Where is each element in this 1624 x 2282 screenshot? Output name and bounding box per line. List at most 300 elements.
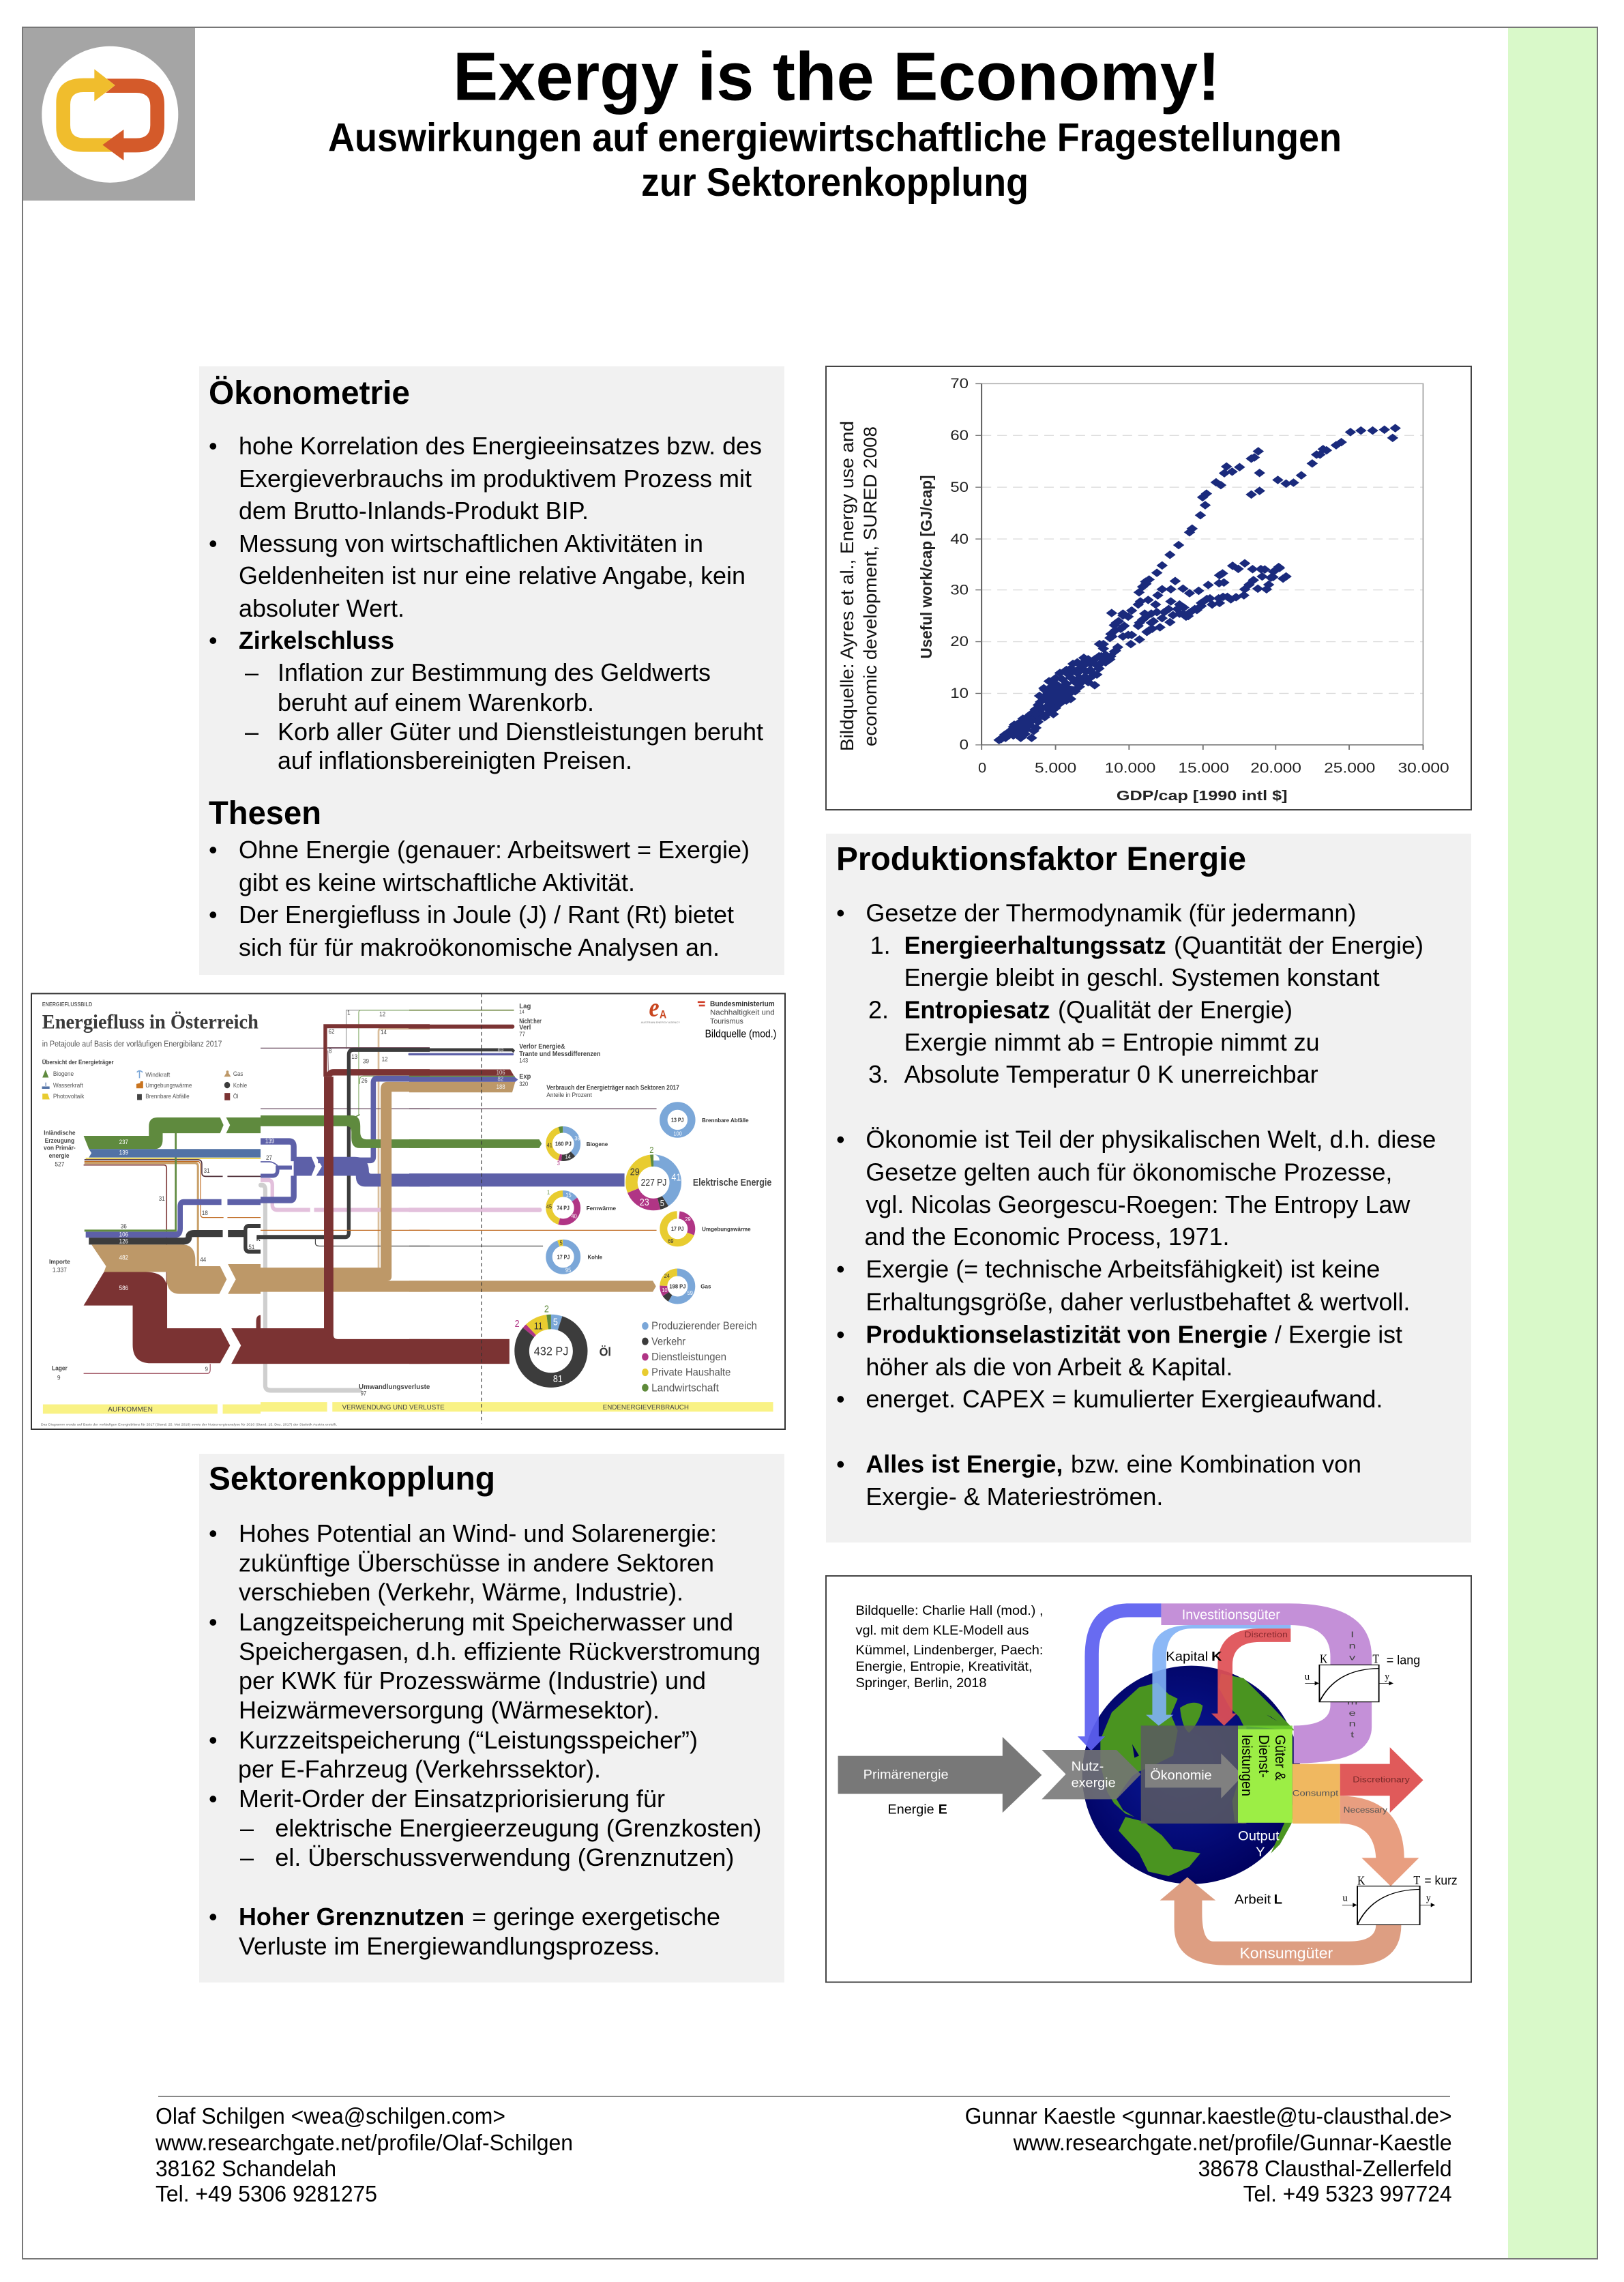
chevron: Nutzexergie: exergie xyxy=(1072,1776,1116,1790)
donut labels and sector legend: Elektrische Energie xyxy=(693,1177,772,1188)
output labels: Verbrauch der Energieträger nach Sektoren 2017 xyxy=(546,1084,679,1092)
text block: Ökonometrie bullets: dem Brutto-Inlands-Produkt BIP. xyxy=(239,497,589,525)
arrow: Discretionary xyxy=(1340,1747,1423,1813)
flow values: 12 xyxy=(379,1010,385,1018)
energy carrier legend: Gas xyxy=(233,1070,243,1077)
arrow: Investitionsgüter: Investitionsgüter xyxy=(1182,1607,1280,1622)
output labels: Nicht:her xyxy=(519,1017,542,1025)
arrow: Investitionsgüter: I xyxy=(1350,1630,1354,1639)
arrow: blue feedback xyxy=(1078,1603,1161,1751)
logos: Tourismus xyxy=(710,1018,743,1026)
donut: Biogene xyxy=(549,1130,577,1158)
tick labels: 50 xyxy=(950,480,969,495)
source group labels: Erzeugung xyxy=(45,1137,74,1144)
donut labels and sector legend: Fernwärme xyxy=(587,1205,617,1212)
energy carrier legend: Photovoltaik xyxy=(53,1093,85,1100)
text block: Ökonometrie bullets: Messung von wirtschaftlichen Aktivitäten in xyxy=(239,529,703,557)
text block: Ökonomie und Exergie: • xyxy=(836,1255,845,1283)
flow values: 482 xyxy=(119,1254,128,1261)
text block: Ökonometrie bullets: absoluter Wert. xyxy=(239,594,404,622)
flow values: 44 xyxy=(200,1256,206,1263)
text block: Thesen bullets: • xyxy=(209,901,218,928)
transfer block: long time constant: = lang xyxy=(1387,1653,1420,1667)
source group labels: energie xyxy=(49,1152,70,1159)
text block: Ökonomie und Exergie: energet. CAPEX = kumulierter Exergieaufwand. xyxy=(866,1385,1383,1413)
energy carrier legend: Kohle xyxy=(233,1082,247,1089)
text block: Sektorenkopplung bullets: per E-Fahrzeug (Verkehrssektor). xyxy=(238,1755,601,1783)
subtitle: Auswirkungen auf energiewirtschaftliche Fragestellungen xyxy=(328,115,1342,160)
donut labels and sector legend: 81 xyxy=(553,1373,563,1384)
text block: Gesetze der Thermodynamik: • xyxy=(836,899,845,926)
section labels xyxy=(342,1383,689,1411)
flow values: 31 xyxy=(159,1195,165,1202)
text block: Sektorenkopplung bullets: • xyxy=(209,1785,218,1813)
footer: author Olaf Schilgen: Olaf Schilgen <wea@schilgen.com> xyxy=(156,2103,505,2129)
flow values: 139 xyxy=(119,1149,128,1156)
energy carrier legend: Wasserkraft xyxy=(53,1082,83,1089)
arrow: Investitionsgüter: n xyxy=(1348,1642,1356,1651)
text block: Sektorenkopplung bullets: elektrische Energieerzeugung (Grenzkosten) xyxy=(275,1814,761,1842)
globe xyxy=(1082,1666,1301,1884)
flow values: 18 xyxy=(202,1210,208,1216)
donut labels and sector legend: 17 PJ xyxy=(557,1254,570,1260)
footer rule xyxy=(158,2096,1450,2097)
text block: Ökonometrie bullets: • xyxy=(209,626,218,654)
rotated label: Güter und Dienstleistungen: Dienst- xyxy=(1256,1735,1271,1778)
donut labels and sector legend: 5 xyxy=(553,1316,558,1328)
donut labels and sector legend: 17 PJ xyxy=(671,1225,684,1232)
donut labels and sector legend: 38 xyxy=(574,1135,580,1142)
text block: Sektorenkopplung bullets: zukünftige Überschüsse in andere Sektoren xyxy=(239,1549,714,1577)
subtitle xyxy=(328,115,1342,205)
donut labels and sector legend: Biogene xyxy=(587,1141,608,1147)
text block: Alles ist Energie xyxy=(836,1450,1361,1510)
legend: sectors: Verkehr xyxy=(651,1336,685,1348)
donut labels and sector legend: 40 xyxy=(572,1213,577,1220)
output label xyxy=(1238,1829,1280,1860)
flow values: 139 xyxy=(265,1137,275,1145)
text block: Ökonomie und Exergie: • xyxy=(836,1321,845,1348)
text block: Alles ist Energie: Alles ist Energie, xyxy=(866,1450,1063,1478)
energy carrier legend: Biogene xyxy=(53,1070,74,1077)
text block: Sektorenkopplung bullets: Merit-Order der Einsatzpriorisierung für xyxy=(239,1785,665,1813)
panel: scatter chart useful work vs GDP xyxy=(826,366,1471,810)
text block: Thesen bullets: Ohne Energie (genauer: Arbeitswert = Exergie) xyxy=(239,836,750,864)
footer: author Olaf Schilgen: 38162 Schandelah xyxy=(156,2156,336,2181)
flow values: 26 xyxy=(361,1077,368,1084)
arrow: red discretion: Discretion xyxy=(1244,1630,1288,1639)
donut labels and sector legend: 14 xyxy=(565,1154,571,1160)
flow values: 51 xyxy=(248,1244,255,1250)
source group labels: von Primär- xyxy=(44,1144,76,1152)
text block: Sektorenkopplung bullets: verschieben (Verkehr, Wärme, Industrie). xyxy=(239,1578,683,1606)
legend: sectors: Produzierender Bereich xyxy=(651,1321,757,1332)
output labels: 106 xyxy=(497,1068,505,1076)
text block: Alles ist Energie: bzw. eine Kombination von xyxy=(1071,1450,1361,1478)
arrow: Primärenergie xyxy=(838,1737,1042,1813)
tick labels xyxy=(950,376,1449,776)
sankey left half xyxy=(41,1001,430,1427)
text block: Ökonomie und Exergie: • xyxy=(836,1126,845,1153)
arrow: Necessary xyxy=(1340,1796,1419,1886)
energy carrier legend: Brennbare Abfälle xyxy=(145,1093,190,1100)
text block: Ökonometrie bullets: – xyxy=(245,718,259,746)
logos: A xyxy=(660,1009,666,1021)
data points xyxy=(999,428,1396,740)
text block: Gesetze der Thermodynamik: Entropiesatz xyxy=(904,996,1050,1023)
donut: Umgebungswärme xyxy=(664,1215,692,1243)
text block: Ökonomie und Exergie: Gesetze gelten auch für ökonomische Prozesse, xyxy=(866,1158,1392,1186)
donut labels and sector legend: 5 xyxy=(660,1198,664,1208)
flows xyxy=(84,1010,430,1390)
donut labels and sector legend: 11 xyxy=(534,1320,543,1331)
tick labels: 40 xyxy=(950,531,969,547)
rotated label: Güter und Dienstleistungen xyxy=(1239,1735,1288,1796)
donut labels and sector legend: 432 PJ xyxy=(534,1346,568,1358)
arrow: Investitionsgüter: m xyxy=(1347,1698,1357,1707)
text block: Gesetze der Thermodynamik: 2. xyxy=(868,996,889,1023)
text block: Gesetze der Thermodynamik: Absolute Temperatur 0 K unerreichbar xyxy=(904,1060,1318,1088)
footer: author Olaf Schilgen xyxy=(155,2103,573,2206)
logos: e xyxy=(649,992,660,1022)
donut labels and sector legend: 74 PJ xyxy=(557,1205,570,1212)
output labels: Verl xyxy=(519,1023,531,1032)
donut: Elektrische Energie xyxy=(632,1160,675,1205)
text block: Ökonometrie bullets: Zirkelschluss xyxy=(239,626,394,654)
text block: Gesetze der Thermodynamik: Gesetze der Thermodynamik (für jedermann) xyxy=(866,899,1356,926)
donut labels and sector legend: Gas xyxy=(700,1283,711,1290)
donut labels and sector legend: Brennbare Abfälle xyxy=(702,1117,749,1124)
text block: Gesetze der Thermodynamik: (Quantität der Energie) xyxy=(1174,931,1423,959)
subtitle: zur Sektorenkopplung xyxy=(641,160,1029,205)
donut: Gas xyxy=(664,1272,692,1300)
donut labels and sector legend: 13 PJ xyxy=(671,1117,684,1124)
heading: Sektorenkopplung: Sektorenkopplung xyxy=(209,1461,495,1497)
arrow: Konsumgüter: Konsumgüter xyxy=(1239,1945,1333,1962)
source group labels: Lager xyxy=(52,1364,68,1372)
label: Energie E: E xyxy=(939,1802,947,1817)
donut: Brennbare Abfälle xyxy=(664,1106,692,1134)
y axis title: Useful work/cap [GJ/cap] xyxy=(917,475,935,659)
footer: author Olaf Schilgen: Tel. +49 5306 9281275 xyxy=(156,2181,377,2206)
text block: Sektorenkopplung bullets: • xyxy=(209,1608,218,1636)
transfer block: short time constant: K xyxy=(1357,1875,1365,1888)
energy carrier legend xyxy=(42,1070,247,1100)
donut labels and sector legend: 41 xyxy=(547,1142,552,1149)
output labels: Trante und Messdifferenzen xyxy=(519,1050,601,1058)
text block: Sektorenkopplung bullets: Kurzzeitspeicherung (“Leistungsspeicher”) xyxy=(239,1726,698,1754)
source note: Springer, Berlin, 2018 xyxy=(855,1676,986,1691)
tick labels: 20 xyxy=(950,634,969,649)
flow: Brennstoffe dünn xyxy=(84,1165,166,1329)
label: Kapital K: Kapital xyxy=(1166,1650,1208,1664)
diagram heading xyxy=(42,1001,259,1066)
donut labels and sector legend: 69 xyxy=(668,1238,674,1244)
label: Arbeit L: L xyxy=(1274,1892,1282,1907)
text block: Ökonomie und Exergie: and the Economic Process, 1971. xyxy=(865,1223,1229,1250)
text block: Gesetze der Thermodynamik: 1. xyxy=(870,931,891,959)
output label: Output xyxy=(1238,1829,1280,1843)
output labels: 14 xyxy=(519,1008,525,1015)
arrow: Investitionsgüter: n xyxy=(1348,1720,1356,1729)
text block: Ökonomie und Exergie: Ökonomie ist Teil der physikalischen Welt, d.h. diese xyxy=(866,1126,1436,1153)
text block: Ökonometrie bullets: • xyxy=(209,432,218,460)
flow values: 1 xyxy=(347,1009,351,1016)
donut labels and sector legend: 160 PJ xyxy=(555,1141,572,1147)
image source note: economic development, SURED 2008 xyxy=(860,426,881,746)
text block: Alles ist Energie: Exergie- & Materieströmen. xyxy=(866,1482,1163,1510)
donut labels and sector legend: 5 xyxy=(559,1240,563,1246)
tick labels: 60 xyxy=(950,428,969,443)
transfer block: long time constant: y xyxy=(1385,1671,1389,1682)
legend: sectors: Landwirtschaft xyxy=(651,1382,719,1394)
text block: Ökonometrie bullets: beruht auf einem Warenkorb. xyxy=(278,688,594,716)
panel: KLE economy diagram with globe xyxy=(826,1576,1471,1983)
box: Consumption: Consumpt xyxy=(1293,1789,1339,1798)
logos: AUSTRIAN ENERGY AGENCY xyxy=(641,1021,681,1024)
donut: Kohle xyxy=(549,1243,577,1271)
text block: Ökonometrie bullets: Geldenheiten ist nur eine relative Angabe, kein xyxy=(239,561,745,589)
text block: Ökonomie und Exergie: Produktionselastizität von Energie xyxy=(866,1321,1267,1348)
donut labels and sector legend: 23 xyxy=(640,1197,649,1208)
flow values: 14 xyxy=(381,1029,387,1036)
section labels: VERWENDUNG UND VERLUSTE xyxy=(342,1403,445,1411)
tick labels: 30.000 xyxy=(1398,761,1449,776)
transfer block: short time constant: = kurz xyxy=(1424,1874,1458,1888)
text block: Sektorenkopplung bullets: – xyxy=(240,1843,254,1871)
image source note: Bildquelle: Ayres et al., Energy use and xyxy=(837,421,857,751)
donut labels and sector legend xyxy=(515,1117,772,1394)
arrow: Investitionsgüter xyxy=(1161,1603,1372,1764)
flow values: 12 xyxy=(382,1055,388,1063)
text block: Ökonomie und Exergie xyxy=(836,1126,1436,1413)
label: Kapital K: K xyxy=(1211,1650,1222,1664)
tick labels: 0 xyxy=(960,737,969,752)
diagram heading: Energiefluss in Österreich xyxy=(42,1010,259,1033)
energy carrier legend: Windkraft xyxy=(145,1071,171,1079)
chevron: Nutzexergie: Nutz- xyxy=(1072,1759,1104,1774)
heading: Produktionsfaktor Energie: Produktionsfaktor Energie xyxy=(836,841,1246,877)
source note: Kümmel, Lindenberger, Paech: xyxy=(855,1643,1044,1658)
text block: Sektorenkopplung bullets: = geringe exergetische xyxy=(472,1903,720,1931)
text block: Thesen bullets: sich für für makroökonomische Analysen an. xyxy=(239,933,720,961)
output labels: 82 xyxy=(497,1075,503,1083)
text block: Ökonomie und Exergie: • xyxy=(836,1385,845,1413)
output labels: Lag xyxy=(519,1002,531,1010)
output labels: Verlor Energie& xyxy=(519,1043,565,1051)
diagram footnote: Das Diagramm wurde auf Basis der vorläufigen Energiebilanz für 2017 (Stand: 25. Mai 2018) sowie der Nutzenergieanalyse für 2016 (Stand: 15. Dez. 2017) der Statistik Austria erstellt. xyxy=(41,1423,337,1427)
flow values: 9 xyxy=(205,1366,208,1373)
donut labels and sector legend: Öl xyxy=(600,1345,611,1359)
transfer block: short time constant: T xyxy=(1413,1874,1420,1887)
label: Arbeit L: Arbeit xyxy=(1235,1892,1271,1907)
flow values: 39 xyxy=(363,1057,369,1065)
source note xyxy=(855,1604,1044,1691)
arrow: Investitionsgüter: e xyxy=(1348,1709,1356,1718)
text block: Gesetze der Thermodynamik: Exergie nimmt ab = Entropie nimmt zu xyxy=(904,1028,1320,1056)
image source note: Bildquelle (mod.) xyxy=(705,1029,776,1040)
tick labels: 5.000 xyxy=(1035,761,1076,776)
output labels: Anteile in Prozent xyxy=(546,1092,592,1098)
tick labels: 10.000 xyxy=(1105,761,1155,776)
text block: Sektorenkopplung bullets: Verluste im Energiewandlungsprozess. xyxy=(239,1932,660,1960)
arrow: Investitionsgüter: v xyxy=(1349,1653,1356,1662)
tick labels: 70 xyxy=(950,376,969,392)
source note: Bildquelle: Charlie Hall (mod.) , xyxy=(855,1604,1044,1618)
donut labels and sector legend: 29 xyxy=(630,1167,640,1177)
text block: Ökonomie und Exergie: / Exergie ist xyxy=(1275,1321,1402,1348)
donut labels and sector legend: 100 xyxy=(673,1130,682,1137)
arrow: Primärenergie: Primärenergie xyxy=(863,1768,949,1782)
flow values: 126 xyxy=(119,1238,128,1245)
transfer block: short time constant: y xyxy=(1426,1892,1431,1903)
text block: Sektorenkopplung bullets: • xyxy=(209,1903,218,1931)
text block: Ökonomie und Exergie: vgl. Nicolas Georgescu-Roegen: The Entropy Law xyxy=(866,1190,1411,1218)
output label: Y xyxy=(1256,1845,1265,1860)
section labels: 97 xyxy=(361,1390,367,1397)
footer: author Olaf Schilgen: www.researchgate.net/profile/Olaf-Schilgen xyxy=(155,2130,573,2155)
chart plot xyxy=(950,376,1449,804)
text block: Gesetze der Thermodynamik: 3. xyxy=(868,1060,889,1088)
text block: Ökonomie und Exergie: Erhaltungsgröße, daher verlustbehaftet & wertvoll. xyxy=(866,1288,1410,1315)
legend: sectors: Private Haushalte xyxy=(651,1367,730,1379)
text block: Gesetze der Thermodynamik: Energieerhaltungssatz xyxy=(904,931,1166,959)
label: Energie E: Energie xyxy=(888,1802,934,1817)
flow values: 8 xyxy=(329,1047,332,1055)
donut labels and sector legend: 3 xyxy=(557,1160,560,1167)
transfer block: short time constant xyxy=(1342,1874,1458,1925)
text block: Ökonometrie bullets: auf inflationsbereinigten Preisen. xyxy=(278,746,632,774)
flow: Rest xyxy=(325,1026,430,1077)
panel: Produktionsfaktor Energie xyxy=(826,834,1471,1542)
logos xyxy=(641,992,775,1026)
logos: Nachhaltigkeit und xyxy=(710,1009,775,1017)
transfer block: long time constant: K xyxy=(1320,1652,1327,1666)
donut labels and sector legend: 1 xyxy=(547,1189,550,1196)
text block: Thesen bullets xyxy=(209,836,750,961)
text block: Sektorenkopplung bullets: el. Überschussverwendung (Grenznutzen) xyxy=(275,1843,734,1871)
output labels: 69 xyxy=(497,1047,503,1053)
source note: Energie, Entropie, Kreativität, xyxy=(855,1660,1033,1674)
box: Ökonomie: Ökonomie xyxy=(1150,1768,1212,1783)
green side strip xyxy=(1508,27,1597,2259)
logo xyxy=(23,27,195,201)
flow values: 36 xyxy=(121,1223,127,1230)
flows xyxy=(409,1010,657,1364)
flow values: 13 xyxy=(351,1053,357,1060)
output labels: 188 xyxy=(497,1083,505,1090)
source group labels: 1.337 xyxy=(53,1266,67,1274)
energy carrier legend: Öl xyxy=(233,1093,239,1100)
text block: Sektorenkopplung bullets: Hohes Potential an Wind- und Solarenergie: xyxy=(239,1519,717,1547)
text block: Sektorenkopplung bullets: per KWK für Prozesswärme (Industrie) und xyxy=(239,1667,706,1695)
output labels: 320 xyxy=(519,1080,529,1087)
text block: Ökonometrie bullets: Exergieverbrauchs im produktivem Prozess mit xyxy=(239,465,752,493)
donut labels and sector legend: 29 xyxy=(685,1216,691,1223)
text block: Ökonometrie bullets xyxy=(209,432,763,774)
section labels: Umwandlungsverluste xyxy=(359,1383,430,1391)
output labels: 77 xyxy=(519,1031,525,1038)
yellow bar xyxy=(409,1402,773,1411)
diagram shapes xyxy=(838,1603,1458,1965)
diagram heading: in Petajoule auf Basis der vorläufigen Energibilanz 2017 xyxy=(42,1040,222,1049)
donut labels and sector legend: 10 xyxy=(662,1287,668,1293)
arrow: Necessary: Necessary xyxy=(1344,1806,1387,1815)
text block: Thesen bullets: Der Energiefluss in Joule (J) / Rant (Rt) bietet xyxy=(239,901,734,928)
donut labels and sector legend: 15 xyxy=(565,1192,572,1198)
flow values: 237 xyxy=(119,1138,128,1145)
panel: Sankey diagram Energiefluss in Österreich xyxy=(31,992,785,1429)
heading: Ökonometrie: Ökonometrie xyxy=(209,375,410,411)
footer: author Gunnar Kaestle: Gunnar Kaestle <gunnar.kaestle@tu-clausthal.de> xyxy=(965,2103,1452,2129)
text block: Sektorenkopplung bullets: Speichergasen, d.h. effiziente Rückverstromung xyxy=(239,1637,761,1665)
flow values: 27 xyxy=(266,1154,272,1161)
text block: Ökonometrie bullets: hohe Korrelation des Energieeinsatzes bzw. des xyxy=(239,432,762,460)
footer: author Gunnar Kaestle xyxy=(965,2103,1452,2206)
x axis title: GDP/cap [1990 intl $] xyxy=(1117,788,1288,804)
box: Consumption xyxy=(1293,1764,1340,1824)
tick labels: 30 xyxy=(950,582,969,598)
text block: Sektorenkopplung bullets: • xyxy=(209,1726,218,1754)
diagram heading: Übersicht der Energieträger xyxy=(42,1058,114,1066)
text block: Ökonomie und Exergie: Exergie (= technische Arbeitsfähigkeit) ist keine xyxy=(866,1255,1380,1283)
text block: Ökonometrie bullets: Korb aller Güter und Dienstleistungen beruht xyxy=(278,718,763,746)
text block: Sektorenkopplung bullets: Heizwärmeversorgung (Wärmesektor). xyxy=(239,1696,660,1724)
text block: Sektorenkopplung bullets: Hoher Grenznutzen xyxy=(239,1903,464,1931)
footer: author Gunnar Kaestle: 38678 Clausthal-Zellerfeld xyxy=(1198,2156,1452,2181)
panel: Sektorenkopplung xyxy=(199,1454,784,1983)
flow values xyxy=(119,1009,388,1373)
transfer block: long time constant: u xyxy=(1305,1671,1310,1682)
flow values: 106 xyxy=(119,1231,128,1238)
arrow: Investitionsgüter: t xyxy=(1350,1731,1355,1740)
yellow section bars: AUFKOMMEN xyxy=(108,1405,153,1414)
transfer block: short time constant: u xyxy=(1342,1892,1348,1903)
sankey right half xyxy=(342,992,776,1424)
text block: Ökonometrie bullets: – xyxy=(245,658,259,686)
diagram heading: ENERGIEFLUSSBILD xyxy=(42,1001,92,1008)
donut labels and sector legend: 41 xyxy=(671,1172,681,1183)
tick labels: 0 xyxy=(978,761,986,776)
rotated label: Güter und Dienstleistungen: Güter & xyxy=(1272,1735,1288,1781)
donut: Öl xyxy=(522,1322,580,1380)
source group labels: 9 xyxy=(57,1374,61,1381)
transfer block: long time constant xyxy=(1305,1652,1420,1702)
tick labels: 10 xyxy=(950,686,969,701)
source group labels xyxy=(44,1129,76,1381)
panel: Ökonometrie und Thesen xyxy=(199,366,784,975)
donut labels and sector legend: 24 xyxy=(664,1273,670,1279)
flow values: K xyxy=(256,1235,261,1242)
text block: Sektorenkopplung bullets: Langzeitspeicherung mit Speicherwasser und xyxy=(239,1608,733,1636)
text block: Sektorenkopplung bullets xyxy=(209,1519,761,1960)
tick labels: 25.000 xyxy=(1324,761,1375,776)
box: Güter und Dienstleistungen xyxy=(1238,1725,1293,1823)
legend: sectors: Dienstleistungen xyxy=(651,1351,726,1363)
text block: Ökonometrie bullets: • xyxy=(209,529,218,557)
flow values: 31 xyxy=(204,1167,210,1174)
donut labels and sector legend: Kohle xyxy=(588,1254,603,1260)
donut labels and sector legend: 2 xyxy=(544,1304,549,1315)
donut labels and sector legend: 95 xyxy=(565,1267,572,1274)
tick labels: 15.000 xyxy=(1178,761,1229,776)
arrow: Discretionary: Discretionary xyxy=(1353,1776,1410,1785)
yellow section bars xyxy=(43,1402,430,1414)
heading: Thesen: Thesen xyxy=(209,795,321,832)
tick labels: 20.000 xyxy=(1250,761,1301,776)
text block: Thesen bullets: • xyxy=(209,836,218,864)
donut labels and sector legend: 198 PJ xyxy=(669,1283,685,1290)
